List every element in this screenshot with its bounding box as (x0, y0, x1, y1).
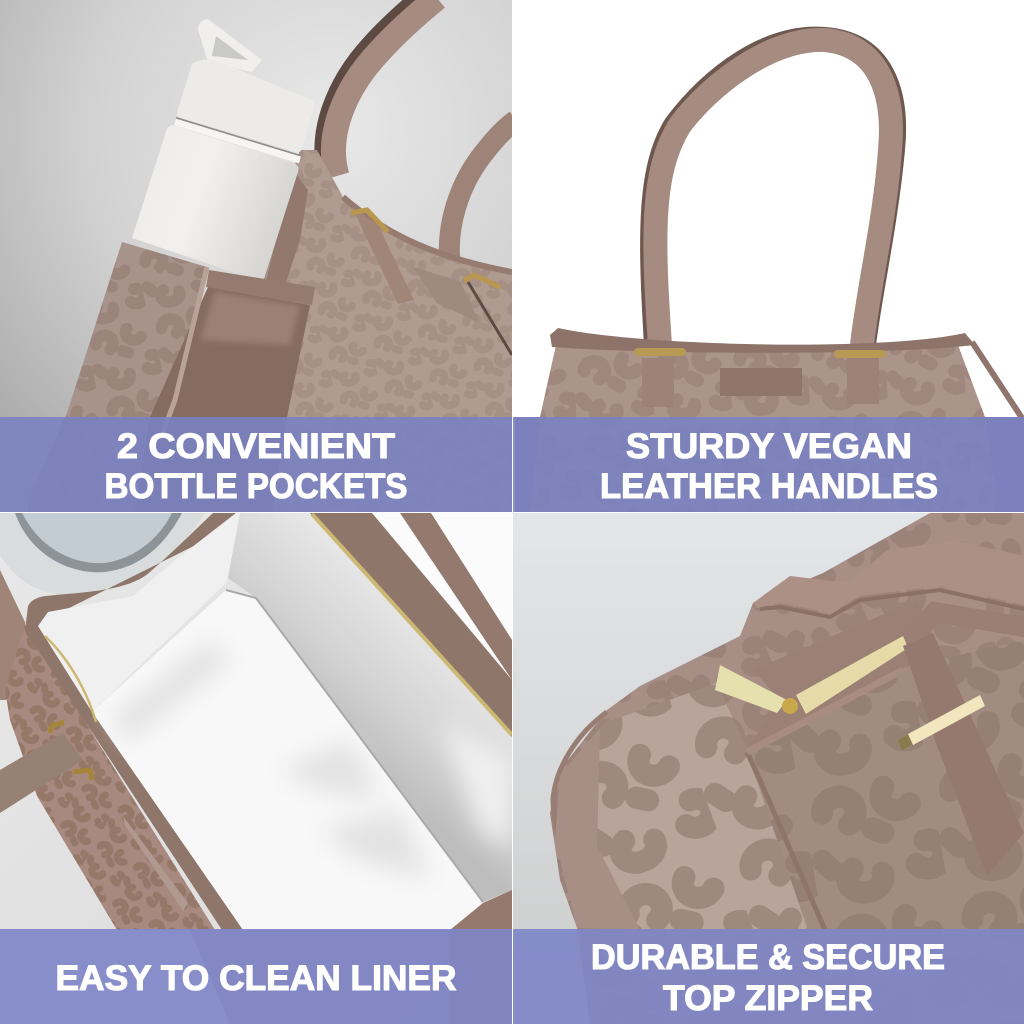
pocket tab (123, 816, 188, 911)
heading (591, 938, 945, 1018)
zipper flap (747, 600, 935, 750)
side pocket (65, 242, 207, 417)
front handle (655, 40, 891, 345)
band (513, 417, 1024, 512)
left strap (0, 733, 83, 813)
heading: 2 CONVENIENT (117, 427, 395, 466)
panel: liner (0, 513, 512, 1024)
gold buckles (351, 210, 500, 287)
zipper slider (782, 698, 798, 714)
bottle neck (175, 122, 300, 160)
right wall highlight (440, 720, 512, 850)
side pockets (515, 417, 1024, 512)
heading: EASY TO CLEAN LINER (56, 959, 456, 998)
background (0, 513, 512, 929)
bar end (897, 734, 913, 751)
right handle (400, 513, 512, 680)
lining (597, 683, 823, 930)
strap tab (903, 633, 1024, 876)
heading (106, 432, 407, 499)
bag body (262, 150, 512, 417)
zipper right (312, 514, 512, 735)
heading (602, 432, 938, 499)
back strap (0, 570, 27, 700)
front top edge (747, 670, 903, 752)
liner base (92, 590, 483, 930)
bag rim (25, 513, 243, 930)
mesh highlight (200, 292, 300, 345)
strap stripe (468, 282, 512, 355)
water bottle (132, 19, 315, 282)
liner creases (110, 640, 430, 880)
handle tabs (642, 358, 879, 407)
bag silhouette (550, 513, 1024, 1024)
lid outer (0, 513, 205, 596)
bag body (530, 345, 1000, 512)
panel: zipper (513, 513, 1024, 1024)
liner left wall (38, 513, 240, 712)
background (513, 0, 1024, 512)
band (0, 417, 512, 512)
side strap (972, 342, 1022, 418)
back handle edge (643, 30, 903, 345)
handle strap (753, 541, 1024, 613)
heading: LEATHER HANDLES (600, 467, 938, 506)
gold hardware (50, 722, 92, 780)
tab (352, 207, 414, 304)
spout hole (212, 36, 248, 60)
bottle body (132, 125, 298, 282)
panel: handles (513, 0, 1024, 512)
lid glass (22, 513, 172, 563)
gold buckles (634, 348, 886, 358)
background (513, 513, 1024, 1024)
heading: DURABLE & SECURE (591, 938, 945, 977)
bottle cap (177, 60, 315, 152)
zipper pull (715, 665, 787, 713)
top trim (550, 328, 975, 353)
bag front (745, 640, 1024, 1024)
bottom bag (190, 930, 512, 1024)
outer side rim (553, 712, 640, 930)
pocket mesh (135, 287, 310, 512)
far handle (449, 120, 516, 262)
brand label (720, 368, 802, 396)
panel: bottle pockets (0, 0, 516, 512)
heading: TOP ZIPPER (663, 979, 873, 1018)
white top right (300, 513, 512, 720)
zipper (796, 636, 908, 714)
band (513, 929, 1024, 1024)
dark inner fold (266, 176, 308, 282)
background (0, 0, 512, 512)
front seam (747, 752, 825, 930)
brand label (418, 270, 475, 316)
near handle (329, 0, 437, 176)
pocket seam (166, 266, 210, 417)
bag outer left (5, 625, 215, 930)
bottle lid (0, 513, 205, 596)
gold bar (897, 695, 985, 751)
heading: BOTTLE POCKETS (104, 467, 408, 506)
bottom right bag (450, 890, 512, 1024)
lid ring (15, 513, 182, 572)
liner right wall (228, 513, 512, 902)
zipper left (45, 636, 96, 722)
handle strap shadow (760, 590, 1024, 617)
bottle spout (198, 19, 262, 72)
right rim (310, 513, 512, 738)
band (0, 929, 512, 1024)
side fabric (555, 728, 640, 930)
bag top trim (343, 197, 512, 272)
base seam (226, 590, 483, 902)
pocket band (206, 270, 315, 305)
heading: STURDY VEGAN (626, 427, 912, 466)
lower handle (908, 612, 1024, 640)
bottle neck ring (176, 118, 301, 156)
